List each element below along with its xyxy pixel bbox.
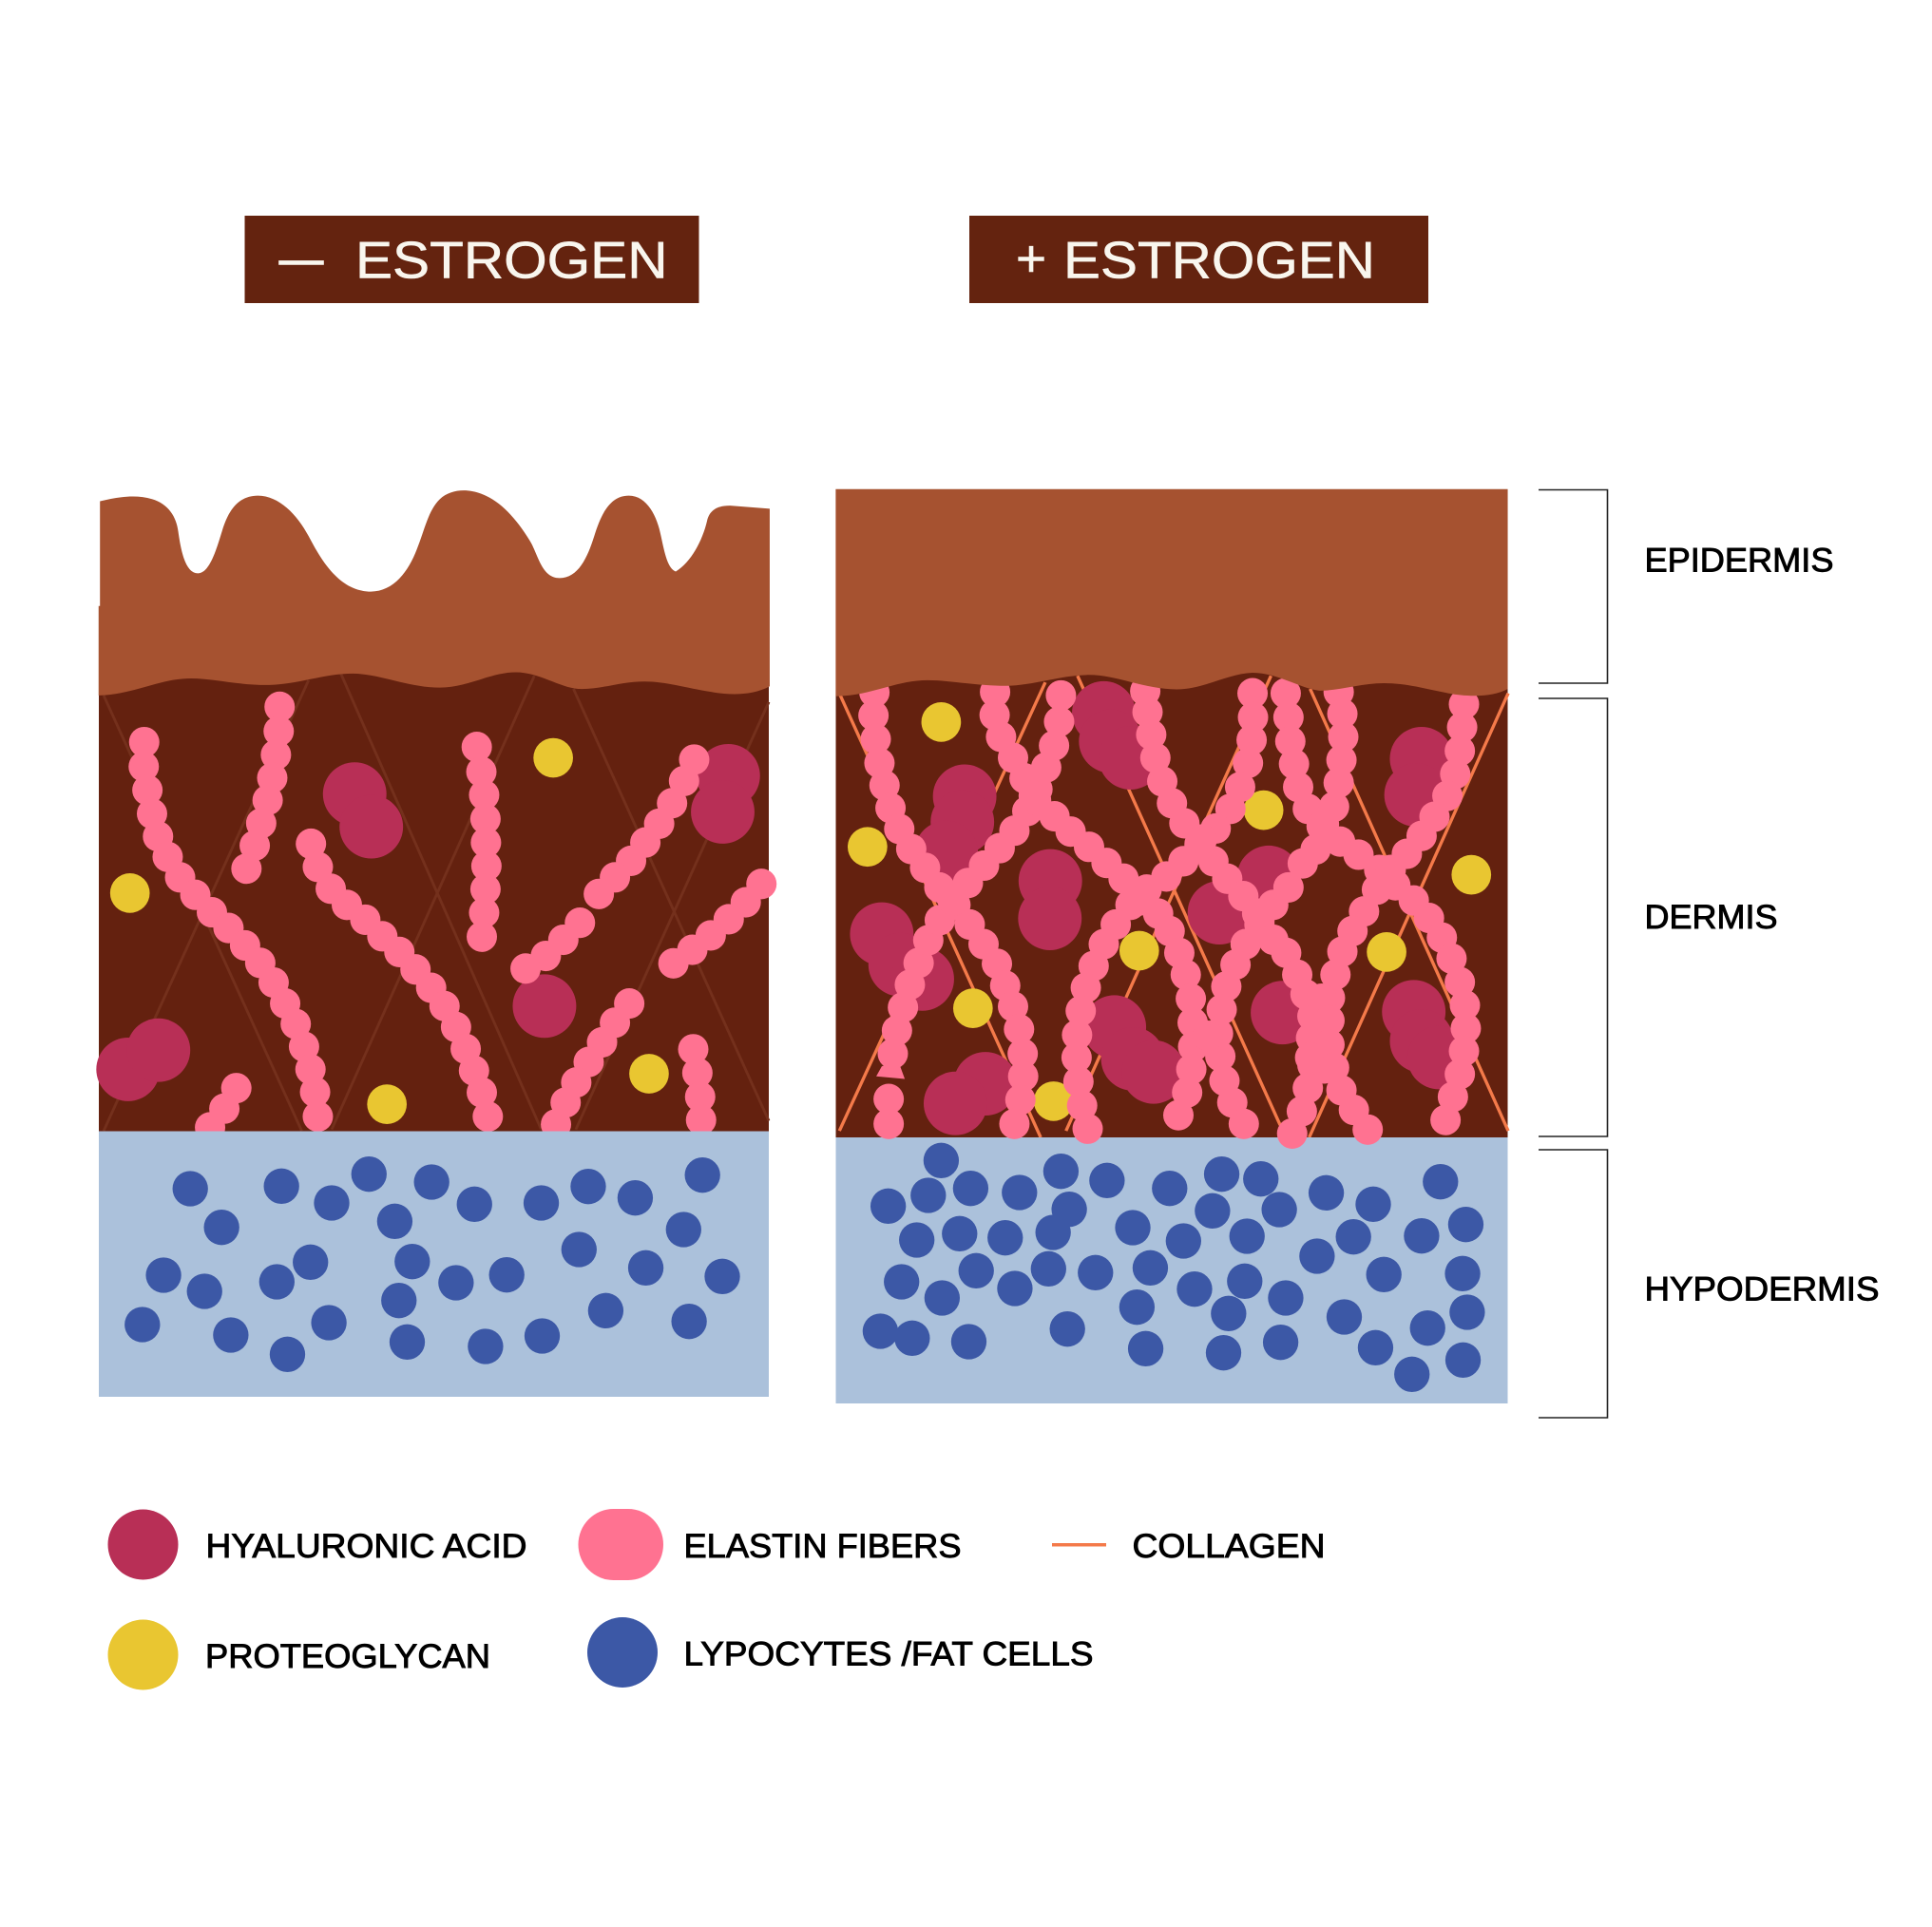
legend: lypocytes / fat cells: LYPOCYTES /FAT CELLS (684, 1636, 1093, 1672)
legend: proteoglycan: PROTEOGLYCAN (205, 1638, 490, 1675)
legend: proteoglycan (108, 1619, 490, 1689)
proteoglycan dots (110, 738, 669, 1124)
legend: elastin fibers: ELASTIN FIBERS (684, 1528, 962, 1565)
faint collagen lines (104, 674, 769, 1131)
label: epidermis: EPIDERMIS (1644, 542, 1834, 580)
legend (108, 1509, 1325, 1689)
heading: plus estrogen: + (1016, 229, 1046, 288)
panel: skin with estrogen (835, 489, 1508, 1403)
legend: hyaluronic acid (108, 1509, 526, 1579)
fat cells (863, 1143, 1485, 1392)
elastin fibers (858, 676, 1481, 1149)
heading: plus estrogen: ESTROGEN (1063, 231, 1375, 290)
fat cells (124, 1156, 740, 1372)
legend: collagen: COLLAGEN (1133, 1528, 1325, 1565)
legend: hyaluronic acid: HYALURONIC ACID (205, 1528, 526, 1565)
hypodermis layer (99, 1131, 769, 1397)
heading: minus estrogen (245, 216, 699, 303)
hypodermis layer (836, 1137, 1507, 1403)
heading: plus estrogen (969, 216, 1428, 303)
hyaluronic acid clusters (96, 744, 760, 1101)
smooth epidermis (835, 489, 1508, 696)
bracket: hypodermis (1539, 1150, 1608, 1418)
hyaluronic acid clusters (850, 681, 1471, 1135)
bracket: epidermis (1539, 490, 1608, 683)
heading: minus estrogen: ESTROGEN (355, 231, 667, 290)
legend: elastin fibers (578, 1509, 962, 1580)
proteoglycan dots (848, 702, 1491, 1121)
panel: skin without estrogen (96, 490, 776, 1397)
bracket: dermis (1539, 698, 1608, 1136)
dermis layer (836, 665, 1507, 1138)
wrinkled epidermis (99, 490, 770, 696)
legend: collagen (1052, 1528, 1325, 1565)
legend: lypocytes / fat cells (587, 1617, 1093, 1688)
dermis layer (99, 665, 769, 1132)
collagen lines (839, 676, 1508, 1137)
heading: minus estrogen: — (279, 234, 323, 283)
label: hypodermis: HYPODERMIS (1644, 1271, 1880, 1307)
elastin fibers (128, 692, 776, 1143)
label: dermis: DERMIS (1644, 899, 1777, 936)
